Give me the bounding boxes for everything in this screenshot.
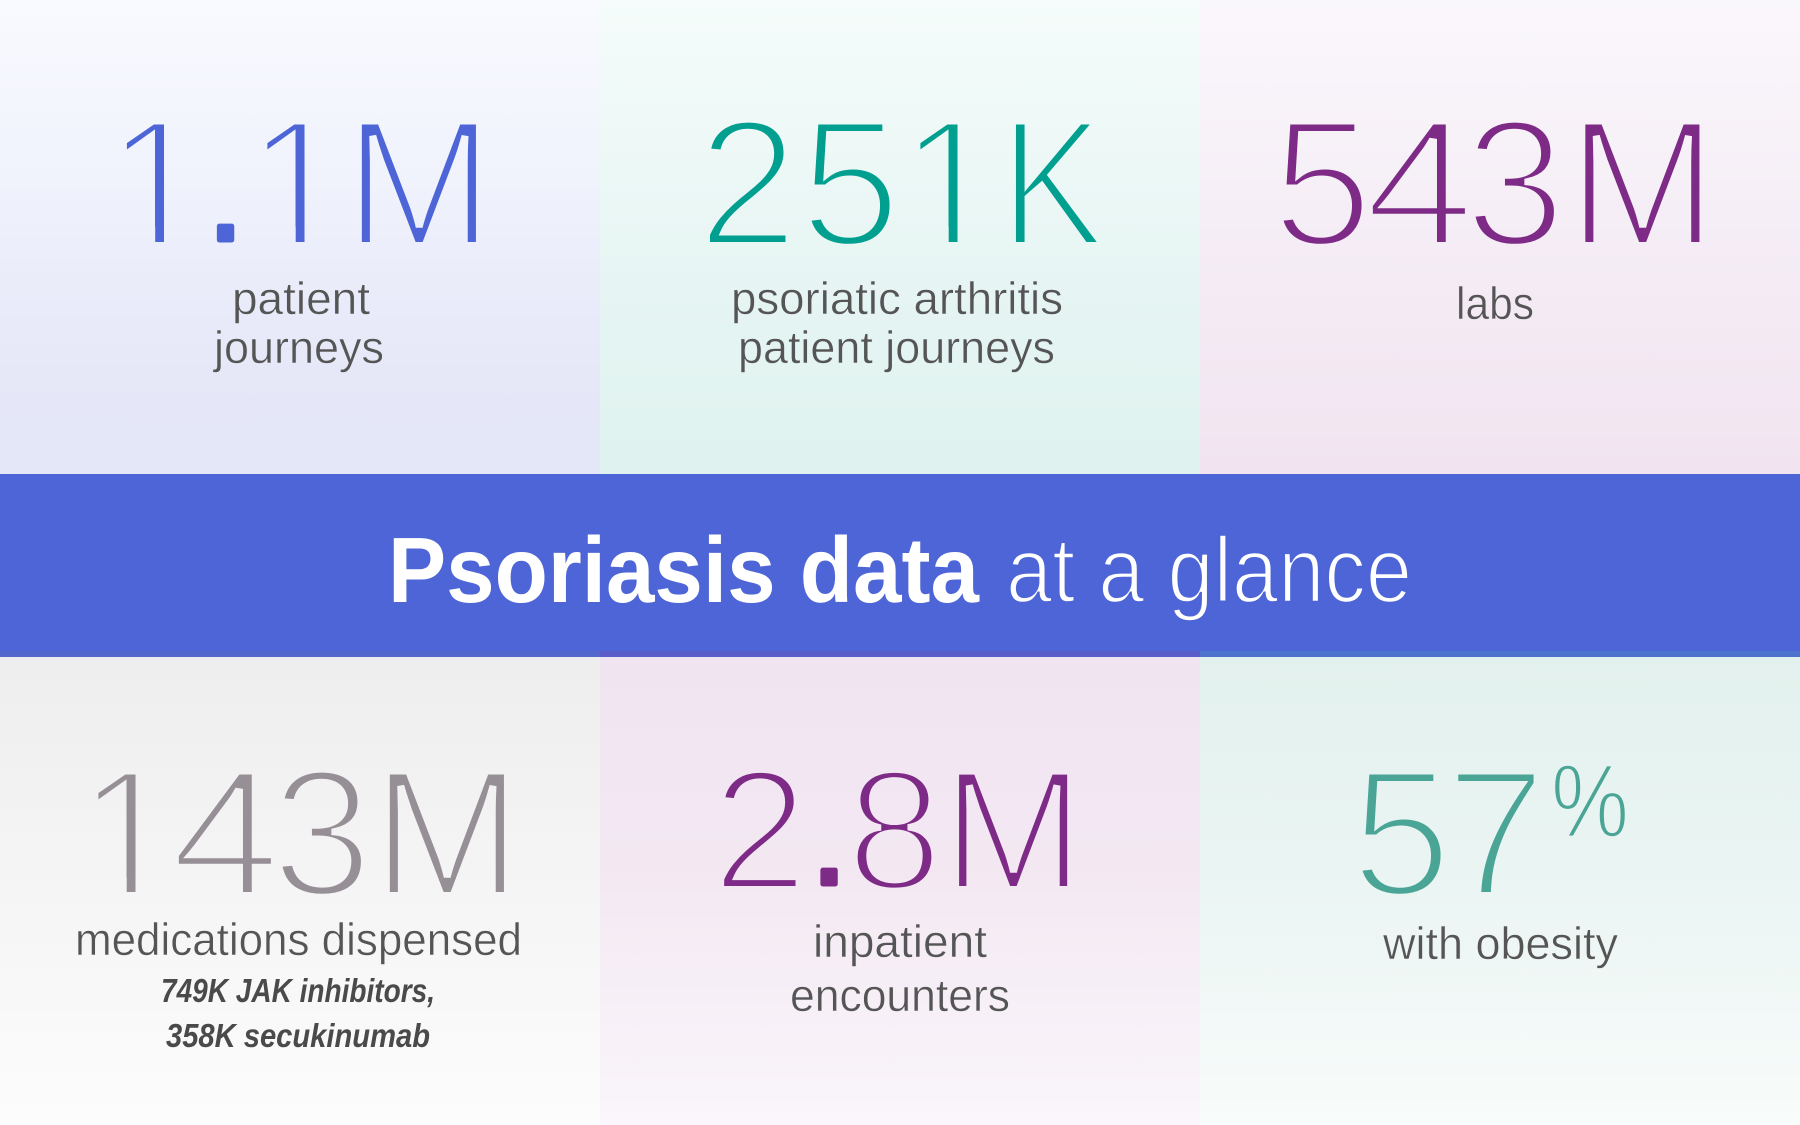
panel: with obesity: [1200, 657, 1800, 1125]
banner: [0, 474, 1800, 657]
panel: labs: [1200, 0, 1800, 474]
stat: 57%: 57: [1351, 732, 1546, 934]
stat: 251K: K: [1000, 82, 1105, 284]
stat: 543M: 3M: [1465, 82, 1718, 284]
stat: 143M: [78, 732, 522, 934]
label: inpatient encounters: encounters: [790, 970, 1010, 1021]
label: with obesity: with obesity: [1382, 918, 1618, 969]
stat: 543M: 5: [1272, 82, 1373, 284]
stat: 57%: %: [1551, 744, 1629, 860]
label: medications dispensed: medications dispensed: [75, 914, 522, 965]
stat: 2.8M: .: [811, 766, 847, 912]
label: patient journeys: journeys: [212, 322, 384, 373]
stat: 143M: 3M: [272, 732, 522, 934]
title: at a glance: [1006, 518, 1412, 622]
panel: inpatient encounters: [600, 657, 1200, 1125]
label: psoriatic arthritis patient journeys: [731, 273, 1063, 373]
label: labs: labs: [1456, 278, 1534, 329]
label: psoriatic arthritis patient journeys: psoriatic arthritis: [731, 273, 1063, 324]
label: inpatient encounters: [790, 916, 1010, 1021]
stat: 251K: 251: [697, 82, 1000, 284]
label: patient journeys: patient: [232, 273, 370, 324]
stat: 143M: 4: [170, 732, 280, 934]
sub-label: drug counts: [161, 972, 435, 1054]
panel: patient journeys: [0, 0, 600, 474]
sub-label: drug counts: 749K JAK inhibitors,: [161, 972, 435, 1009]
stat: 543M: [1272, 82, 1718, 284]
label: inpatient encounters: inpatient: [813, 916, 988, 967]
title: Psoriasis data: [388, 518, 980, 622]
panel: psoriatic arthritis: [600, 0, 1200, 474]
panel: medications dispensed: [0, 657, 600, 1125]
sub-label: drug counts: 358K secukinumab: [166, 1017, 430, 1054]
stat: 1.1M: .: [208, 122, 244, 268]
label: psoriatic arthritis patient journeys: patient journeys: [738, 322, 1055, 373]
stat: 1.1M: 11M: [106, 82, 494, 284]
stat: 2.8M: 28M: [712, 734, 1085, 926]
stat: 543M: 4: [1364, 82, 1474, 284]
label: patient journeys: [212, 273, 384, 373]
stat: 143M: 1: [78, 732, 178, 934]
